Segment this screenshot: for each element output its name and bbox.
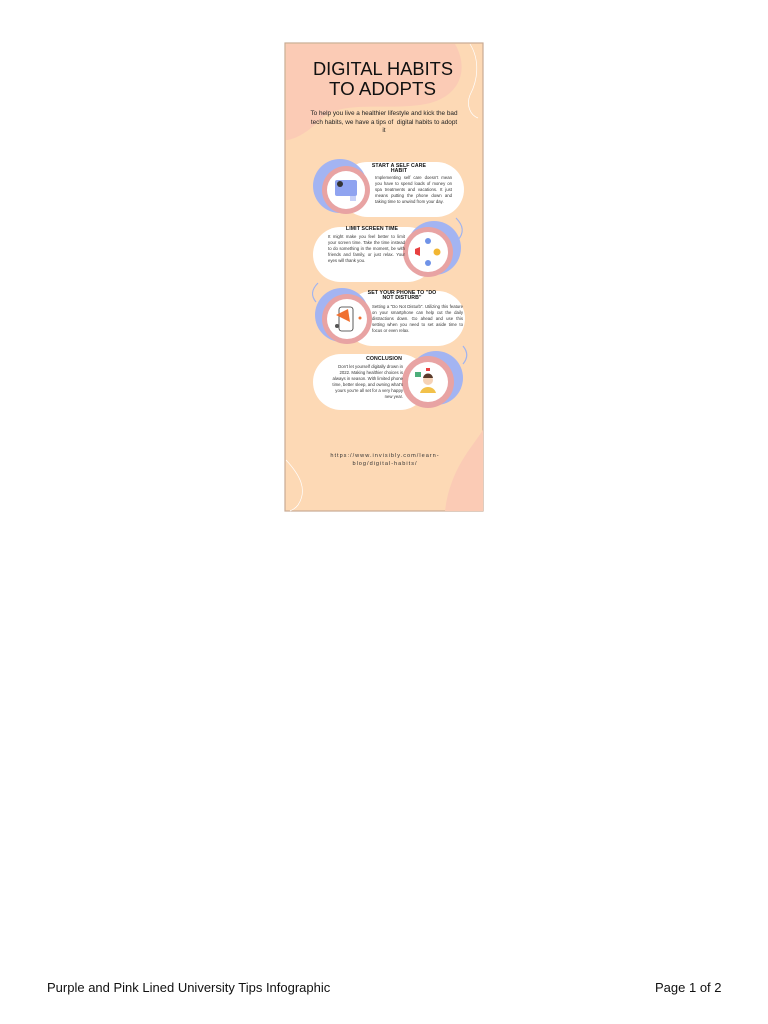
footer left: Purple and Pink Lined University Tips Infographic (47, 980, 330, 995)
step 4 (332, 356, 403, 399)
subtitle: To help you live a healthier lifestyle and kick the bad tech habits, we have a tips of digital habits to adopt it (310, 110, 458, 134)
step 3 (368, 290, 463, 333)
infographic panel: Setting a "Do Not Disturb". Utilizing this feature on your smartphone can help cut the daily distractions down. Go ahead and use this setting when you need to set aside time to focus or even relax. (372, 304, 463, 333)
step 1 (372, 163, 452, 204)
footer right: Page 1 of 2 (655, 980, 722, 995)
title (313, 59, 453, 99)
row 3 shapes (315, 288, 467, 364)
title: DIGITAL HABITS (313, 59, 453, 79)
row 1 shapes (313, 159, 464, 240)
infographic panel: It might make you feel better to limit your screen time. Take the time instead to do something in the moment, be with friends and family, or just relax. Your eyes will thank you. (328, 234, 405, 263)
step 2 (328, 226, 405, 263)
infographic panel: LIMIT SCREEN TIME (346, 226, 398, 232)
title: TO ADOPTS (329, 79, 436, 99)
infographic panel: Don't let yourself digitally drown in 2022. Making healthier choices is always in season. With limited phone time, better sleep, and owning what's yours you're all set for a very happy new year. (332, 364, 403, 399)
infographic panel: CONCLUSION (366, 356, 402, 362)
panel background (285, 43, 483, 511)
infographic panel: Implementing self care doesn't mean you have to spend loads of money on spa treatments and vacations. It just means putting the phone down and taking time to unwind from your day. (375, 175, 452, 204)
infographic panel: SET YOUR PHONE TO "DO NOT DISTURB" (368, 290, 436, 301)
source url: https://www.invisibly.com/learn-blog/digital-habits/ (330, 453, 440, 467)
row 4 shapes (313, 351, 463, 410)
row 2 shapes (312, 221, 461, 302)
infographic panel: START A SELF CARE HABIT (372, 163, 426, 174)
